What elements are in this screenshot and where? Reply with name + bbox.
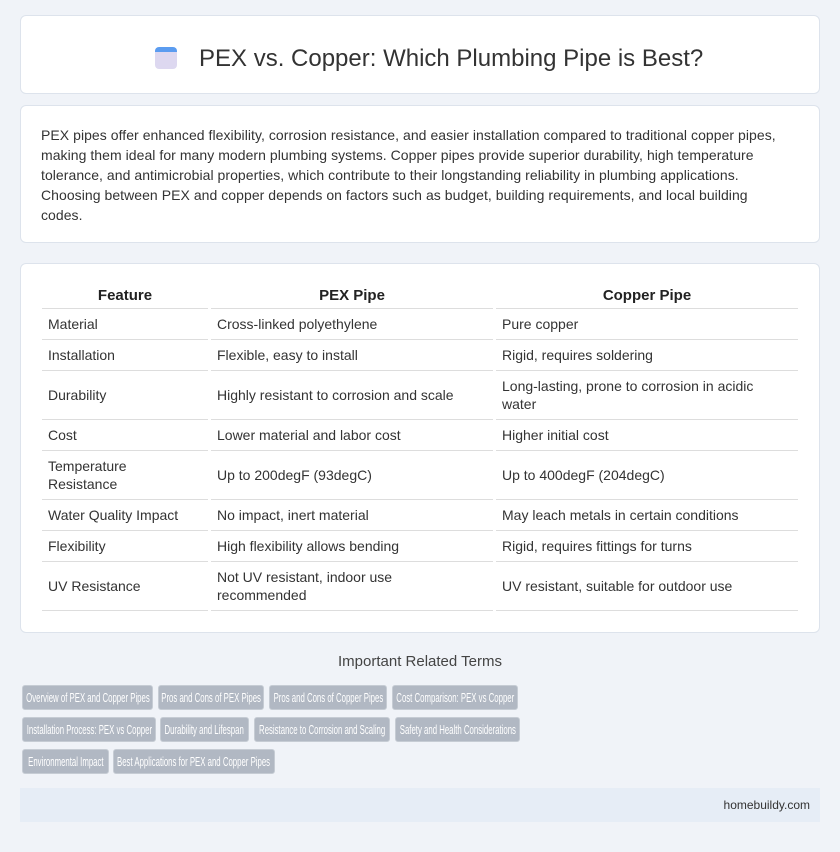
comparison table: Cross-linked polyethylene [217,316,377,332]
comparison table: Durability [48,387,106,403]
comparison table: Cost [48,427,77,443]
comparison table: Resistance [48,476,117,492]
comparison table: Temperature [48,458,127,474]
comparison table [42,287,798,611]
comparison table: Not UV resistant, indoor use [217,569,392,585]
comparison table: recommended [217,587,306,603]
comparison table: Feature [98,287,152,304]
comparison table: UV Resistance [48,578,141,594]
header panel [20,15,820,94]
comparison table: water [502,396,536,412]
related terms heading: Important Related Terms [338,653,502,670]
comparison table: Higher initial cost [502,427,609,443]
comparison table: UV resistant, suitable for outdoor use [502,578,732,594]
comparison table: Up to 200degF (93degC) [217,467,372,483]
related terms tags: Cost Comparison: PEX vs Copper [396,690,514,705]
comparison table: Long-lasting, prone to corrosion in acidic [502,378,753,394]
comparison table: Highly resistant to corrosion and scale [217,387,454,403]
intro text panel [20,105,820,243]
related terms tags: Environmental Impact [28,754,103,769]
comparison table: Material [48,316,98,332]
footer: homebuildy.com [724,798,810,812]
comparison table: Flexibility [48,538,106,554]
comparison table: Water Quality Impact [48,507,178,523]
comparison table: High flexibility allows bending [217,538,399,554]
related terms tags: Best Applications for PEX and Copper Pipes [117,754,271,769]
footer [20,788,820,822]
icon: calendar [155,47,177,69]
comparison table: Up to 400degF (204degC) [502,467,665,483]
comparison table: Copper Pipe [603,287,691,304]
related terms tags: Pros and Cons of Copper Pipes [273,690,383,705]
related terms tags: Safety and Health Considerations [399,722,516,737]
comparison table: Rigid, requires soldering [502,347,653,363]
comparison table: Flexible, easy to install [217,347,358,363]
comparison table: Installation [48,347,115,363]
comparison table: PEX Pipe [319,287,385,304]
table panel [20,263,820,633]
comparison table: Lower material and labor cost [217,427,401,443]
related terms tags: Overview of PEX and Copper Pipes [26,690,149,705]
related terms tags: Durability and Lifespan [165,722,244,737]
comparison table: Pure copper [502,316,578,332]
related terms tags: Resistance to Corrosion and Scaling [259,722,385,737]
related terms tags: Installation Process: PEX vs Copper [26,722,152,737]
related terms tags: Pros and Cons of PEX Pipes [161,690,261,705]
title: PEX vs. Copper: Which Plumbing Pipe is Best? [199,45,703,72]
comparison table: May leach metals in certain conditions [502,507,739,523]
intro text panel: PEX pipes offer enhanced flexibility, corrosion resistance, and easier installation compared to traditional copper pipes, making them ideal for many modern plumbing systems. Copper pipes provide superior durability, high temperature tolerance, and antimicrobial properties, which contribute to their longstanding reliability in plumbing applications. Choosing between PEX and copper depends on factors such as budget, building requirements, and local building codes. [41,127,776,223]
comparison table: Rigid, requires fittings for turns [502,538,692,554]
comparison table: No impact, inert material [217,507,369,523]
